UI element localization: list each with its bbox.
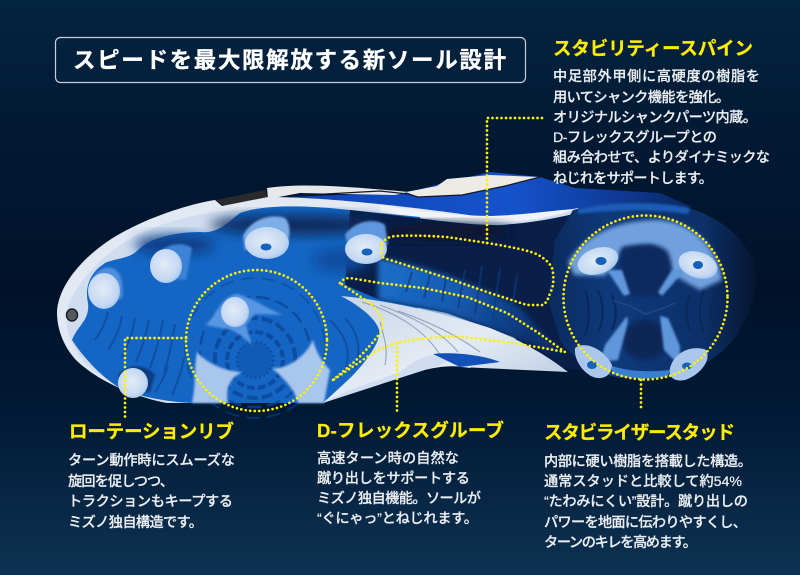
panel: stability spine	[553, 38, 770, 187]
stability spine body text: D-フレックスグループとの	[553, 129, 717, 146]
forefoot sole	[72, 206, 430, 403]
stabilizer stud body text: ターンのキレを高めます。	[544, 534, 697, 551]
stability spine body text: 用いてシャンク機能を強化。	[553, 90, 730, 106]
stability spine body text: 組み合わせで、よりダイナミックな	[553, 149, 770, 166]
heel sole	[548, 202, 756, 378]
D-flex groove body text: “ぐにゃっ”とねじれます。	[317, 511, 478, 527]
heel arch	[568, 220, 722, 290]
rotation rib body text: ターン動作時にスムーズな	[68, 452, 235, 469]
upper white panel	[267, 185, 408, 199]
forefoot ribs	[95, 312, 358, 395]
rotation rib body text: ミズノ独自構造です。	[68, 514, 203, 531]
stabilizer stud body text: “たわみにくい”設計。蹴り出しの	[544, 494, 748, 510]
outer white rim	[57, 197, 578, 403]
panel: rotation rib: ローテーションリブ	[69, 421, 234, 442]
stability spine outline and leader	[381, 118, 553, 305]
heel studs	[574, 242, 721, 380]
forefoot studs	[88, 216, 388, 403]
panel: stability spine: スタビリティースパイン	[553, 38, 753, 59]
panel: stabilizer stud	[544, 422, 752, 551]
panel: D-flex groove: D-フレックスグルーブ	[317, 420, 504, 441]
rotation rib pattern	[185, 278, 325, 418]
stabilizer stud body text: 内部に硬い樹脂を搭載した構造。	[544, 454, 752, 470]
D-flex groove white area	[323, 296, 568, 403]
D-flex groove outline and leader	[333, 278, 565, 415]
stabilizer stud body text	[544, 454, 752, 551]
D-flex groove body text	[317, 450, 481, 527]
title box: スピードを最大限解放する新ソール設計	[73, 48, 506, 73]
black lace strip	[216, 190, 268, 206]
heel ribs and logo	[585, 288, 716, 353]
panel: rotation rib	[68, 421, 235, 531]
heel stud legs	[600, 270, 685, 366]
panel: D-flex groove	[317, 420, 504, 527]
upper mesh	[290, 172, 692, 224]
heel cavity	[618, 245, 671, 296]
stabilizer stud circle and leader	[564, 216, 728, 408]
heel top highlight	[578, 203, 690, 214]
D-flex groove body text: ミズノ独自機能。ソールが	[317, 490, 481, 507]
title box	[56, 38, 526, 82]
stability spine body text: ねじれをサポートします。	[553, 171, 713, 187]
D-flex groove body text: 蹴り出しをサポートする	[317, 471, 470, 487]
shoe sole illustration	[57, 172, 756, 418]
stabilizer stud body text: パワーを地面に伝わりやすくし、	[544, 515, 747, 531]
stability spine body text: 中足部外甲側に高硬度の樹脂を	[553, 68, 760, 85]
rotation rib body text: 旋回を促しつつ、	[68, 474, 174, 490]
white stripe	[380, 205, 576, 222]
midfoot shading	[135, 215, 562, 355]
D-flex groove body text: 高速ターン時の自然な	[317, 450, 459, 467]
midfoot sole	[345, 202, 700, 375]
dotted callout lines	[125, 118, 728, 418]
rotation rib body text	[68, 452, 235, 531]
upper peek under flex	[433, 353, 500, 367]
stability spine body text	[553, 68, 770, 187]
rotation rib circle and leader	[125, 270, 327, 418]
stability spine body text: オリジナルシャンクパーツ内蔵。	[553, 110, 757, 126]
flex groove lines	[362, 302, 480, 365]
midfoot ribs	[406, 266, 517, 322]
eyelet	[66, 309, 78, 321]
rotation rib body text: トラクションもキープする	[68, 494, 233, 510]
panel: stabilizer stud: スタビライザースタッド	[544, 422, 735, 443]
stabilizer stud body text: 通常スタッドと比較して約54%	[544, 474, 742, 490]
